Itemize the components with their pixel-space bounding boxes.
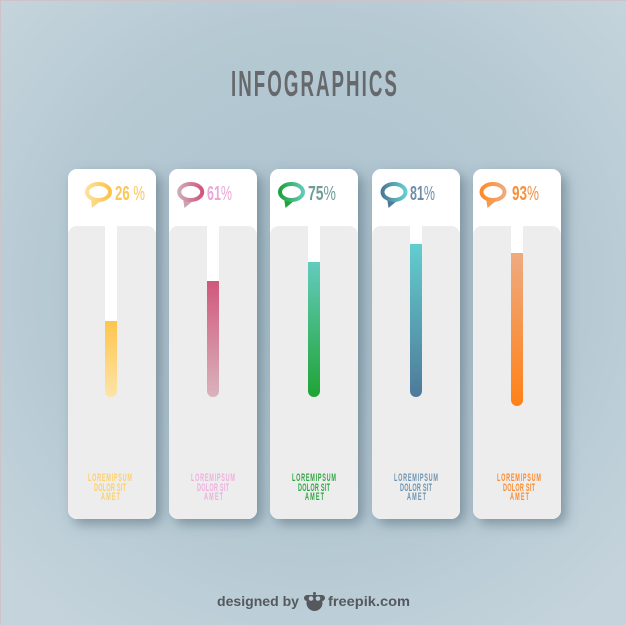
caption: LOREMIPSUM — [497, 471, 541, 484]
percentage value: 81% — [410, 182, 435, 205]
caption: DOLOR SIT — [503, 481, 535, 494]
percentage value: 75% — [308, 182, 336, 205]
panel: 81% blue — [372, 169, 460, 519]
caption — [191, 471, 235, 503]
caption: AMET — [101, 490, 120, 503]
caption — [497, 471, 541, 503]
caption: DOLOR SIT — [298, 481, 330, 494]
caption: DOLOR SIT — [400, 481, 432, 494]
caption — [292, 471, 336, 503]
progress bar — [105, 321, 117, 397]
caption: DOLOR SIT — [197, 481, 229, 494]
panel: 93% orange — [473, 169, 561, 519]
footer credit: designed by — [217, 593, 299, 609]
icon: speech bubble — [482, 184, 504, 208]
percentage value: 26 % — [115, 182, 145, 205]
panel: 75% green — [270, 169, 358, 519]
footer credit: freepik.com — [328, 593, 410, 609]
panel: 61% pink — [169, 169, 257, 519]
caption: LOREMIPSUM — [88, 471, 132, 484]
caption: DOLOR SIT — [94, 481, 126, 494]
caption: AMET — [204, 490, 223, 503]
caption — [394, 471, 438, 503]
icon: freepik logo — [304, 592, 325, 611]
caption — [88, 471, 132, 503]
caption: LOREMIPSUM — [394, 471, 438, 484]
progress bar — [308, 262, 320, 397]
progress bar — [410, 244, 422, 397]
footer credit — [217, 592, 410, 611]
icon: speech bubble — [280, 184, 303, 208]
percentage value: 93% — [512, 182, 539, 205]
caption: AMET — [407, 490, 426, 503]
caption: AMET — [305, 490, 324, 503]
progress bar — [511, 253, 523, 406]
percentage value: 61% — [207, 182, 232, 205]
panel: 26% yellow — [68, 169, 156, 519]
progress bar — [207, 281, 219, 397]
caption: AMET — [510, 490, 529, 503]
icon: speech bubble — [382, 184, 406, 208]
icon: speech bubble — [87, 184, 110, 208]
icon: speech bubble — [179, 184, 202, 208]
caption: LOREMIPSUM — [191, 471, 235, 484]
title: INFOGRAPHICS — [231, 65, 397, 105]
caption: LOREMIPSUM — [292, 471, 336, 484]
